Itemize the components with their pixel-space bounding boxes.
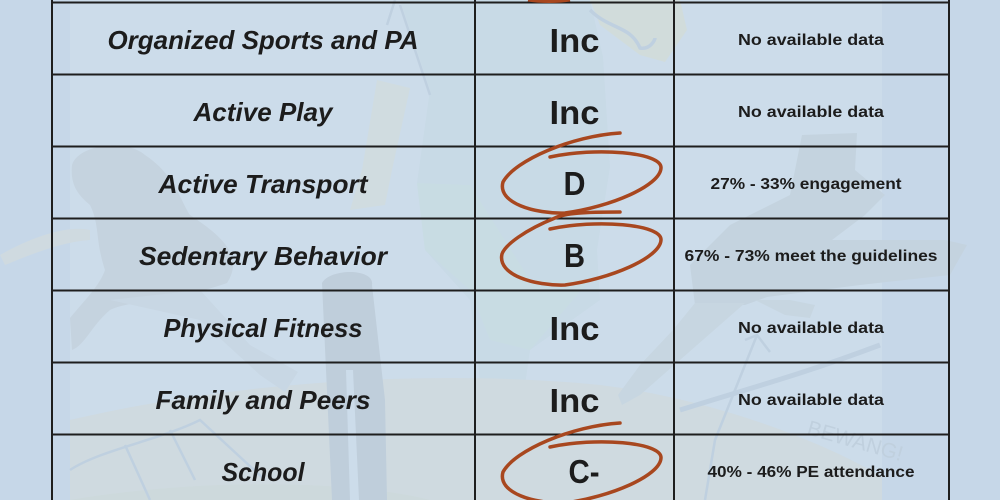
grade circle: C- [502,423,661,500]
row: Sedentary Behavior: Sedentary Behavior [139,241,389,271]
row: Active Transport: Active Transport [157,169,369,199]
row: Family and Peers: No available data [738,392,884,409]
row: Active Play: Inc [550,94,600,131]
ground hills [70,378,882,500]
row: Physical Fitness: Physical Fitness [164,313,362,343]
row: Active Transport [157,165,902,202]
row: Physical Fitness [164,310,884,347]
row: Active Play: No available data [738,104,884,121]
row: Sedentary Behavior: 67% - 73% meet the guidelines [684,248,938,265]
row: Organized Sports and PA: Organized Sports and PA [108,25,418,55]
row: Physical Fitness: Inc [550,310,600,347]
row: School: School [222,457,305,487]
row: Active Transport: 27% - 33% engagement [710,176,902,193]
central player torso [400,0,610,500]
row: Active Play [192,94,884,131]
row: Active Play: Active Play [192,97,334,127]
left player [70,145,233,350]
row: Physical Fitness: No available data [738,320,884,337]
grade circle: B [502,212,661,285]
central player arm [350,80,410,210]
row: Family and Peers [156,382,884,419]
row: Family and Peers: Inc [550,382,600,419]
row: School: 40% - 46% PE attendance [708,464,915,481]
row: Sedentary Behavior [139,237,938,274]
right player [690,133,967,305]
row: Organized Sports and PA: Inc [550,22,600,59]
row: Active Transport: D [564,165,586,202]
BEWANG sketch text: BEWANG! [805,417,906,466]
grade circle: D [502,133,661,213]
row: School [222,453,915,490]
row: School: C- [568,453,600,490]
partial grade circle at top [528,0,570,2]
row: Organized Sports and PA: No available data [738,32,884,49]
row: Sedentary Behavior: B [564,237,585,274]
row: Organized Sports and PA [108,22,884,59]
row: Family and Peers: Family and Peers [156,385,370,415]
cricket bat [322,272,387,500]
